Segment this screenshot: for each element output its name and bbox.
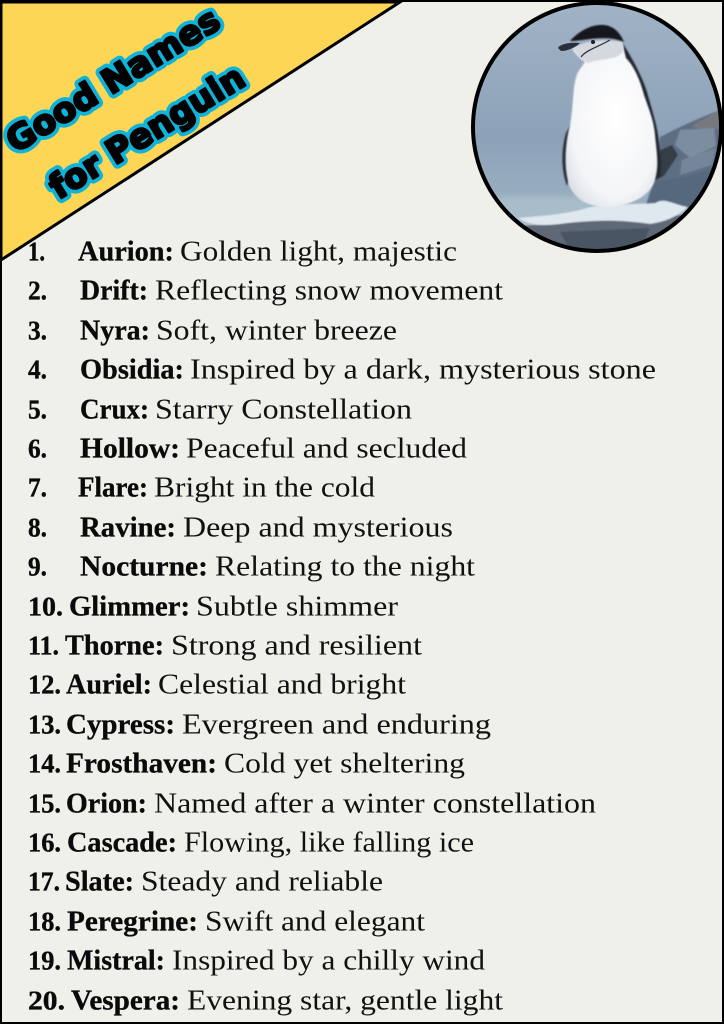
item 12: Celestial and bright <box>158 669 406 701</box>
icon: penguin <box>558 25 661 207</box>
item 20 <box>28 985 503 1017</box>
item 6: Peaceful and secluded <box>186 433 468 465</box>
item 17: Slate: <box>65 866 134 898</box>
item 6 <box>28 433 468 465</box>
item 3: 3. <box>28 316 47 346</box>
item 7: 7. <box>28 473 47 503</box>
item 18: Swift and elegant <box>205 906 425 938</box>
item 7: Flare: <box>78 472 148 504</box>
item 12 <box>28 669 406 701</box>
item 20: Vespera: <box>71 985 180 1017</box>
icon: sea horizon <box>498 197 589 216</box>
item 3: Soft, winter breeze <box>156 315 397 347</box>
item 7: Bright in the cold <box>154 472 376 504</box>
item 11: Thorne: <box>65 630 164 662</box>
item 13: 13. <box>28 710 61 740</box>
item 18: 18. <box>28 907 61 937</box>
item 1 <box>28 236 457 268</box>
title: for Penguin <box>42 58 252 208</box>
item 18 <box>28 906 425 938</box>
item 14: Cold yet sheltering <box>224 748 465 780</box>
item 8: 8. <box>28 513 47 543</box>
item 13 <box>28 709 491 741</box>
item 15: Named after a winter constellation <box>154 788 597 820</box>
item 17: 17. <box>28 867 60 897</box>
item 2: Drift: <box>80 275 148 307</box>
item 16: Flowing, like falling ice <box>184 827 474 859</box>
item 10 <box>28 591 398 623</box>
item 8: Deep and mysterious <box>183 512 453 544</box>
item 19: Mistral: <box>67 945 165 977</box>
item 4: Inspired by a dark, mysterious stone <box>190 354 656 386</box>
item 8: Ravine: <box>80 512 176 544</box>
item 18: Peregrine: <box>67 906 198 938</box>
item 13: Cypress: <box>66 709 175 741</box>
item 19 <box>28 945 486 977</box>
item 14: 14. <box>28 749 61 779</box>
item 16: 16. <box>28 828 61 858</box>
item 15: Orion: <box>66 788 147 820</box>
item 5: Crux: <box>80 394 149 426</box>
item 2 <box>28 275 503 307</box>
item 8 <box>28 512 453 544</box>
item 11 <box>28 630 422 662</box>
icon: rocks <box>522 110 724 256</box>
item 1: Aurion: <box>78 236 174 268</box>
item 20: 20. <box>28 986 65 1016</box>
item 19: 19. <box>28 946 61 976</box>
item 5: 5. <box>28 395 47 425</box>
item 2: 2. <box>28 276 47 306</box>
item 6: 6. <box>28 434 47 464</box>
item 3: Nyra: <box>80 315 150 347</box>
item 4: Obsidia: <box>80 354 184 386</box>
item 10: Subtle shimmer <box>196 591 398 623</box>
item 12: Auriel: <box>66 669 152 701</box>
title: for Penguin <box>42 58 252 208</box>
item 10: Glimmer: <box>69 591 190 623</box>
item 14: Frosthaven: <box>66 748 217 780</box>
item 19: Inspired by a chilly wind <box>172 945 486 977</box>
item 5: Starry Constellation <box>155 394 413 426</box>
item 13: Evergreen and enduring <box>182 709 491 741</box>
item 9: Relating to the night <box>215 551 475 583</box>
item 1: Golden light, majestic <box>180 236 457 268</box>
item 5 <box>28 394 413 426</box>
title <box>0 0 252 208</box>
item 4 <box>28 354 656 386</box>
item 2: Reflecting snow movement <box>155 275 503 307</box>
item 17 <box>28 866 383 898</box>
photo ring <box>473 3 721 251</box>
item 16: Cascade: <box>67 827 177 859</box>
item 6: Hollow: <box>80 433 180 465</box>
item 17: Steady and reliable <box>141 866 383 898</box>
yellow corner banner <box>1 2 400 260</box>
title: Good Names <box>0 0 227 161</box>
item 20: Evening star, gentle light <box>187 985 503 1017</box>
item 16 <box>28 827 474 859</box>
item 3 <box>28 315 397 347</box>
item 11: Strong and resilient <box>171 630 422 662</box>
icon: snow ledge <box>518 201 688 225</box>
item 1: 1. <box>28 237 45 267</box>
item 14 <box>28 748 465 780</box>
item 12: 12. <box>28 670 61 700</box>
item 9: Nocturne: <box>80 551 208 583</box>
circular penguin photo <box>470 0 724 256</box>
item 9: 9. <box>28 552 47 582</box>
item 4: 4. <box>28 355 47 385</box>
item 9 <box>28 551 475 583</box>
item 10: 10. <box>28 592 63 622</box>
item 11: 11. <box>28 631 59 661</box>
item 15: 15. <box>28 789 61 819</box>
title: Good Names <box>0 0 227 161</box>
item 7 <box>28 472 376 504</box>
names list <box>28 236 656 1017</box>
